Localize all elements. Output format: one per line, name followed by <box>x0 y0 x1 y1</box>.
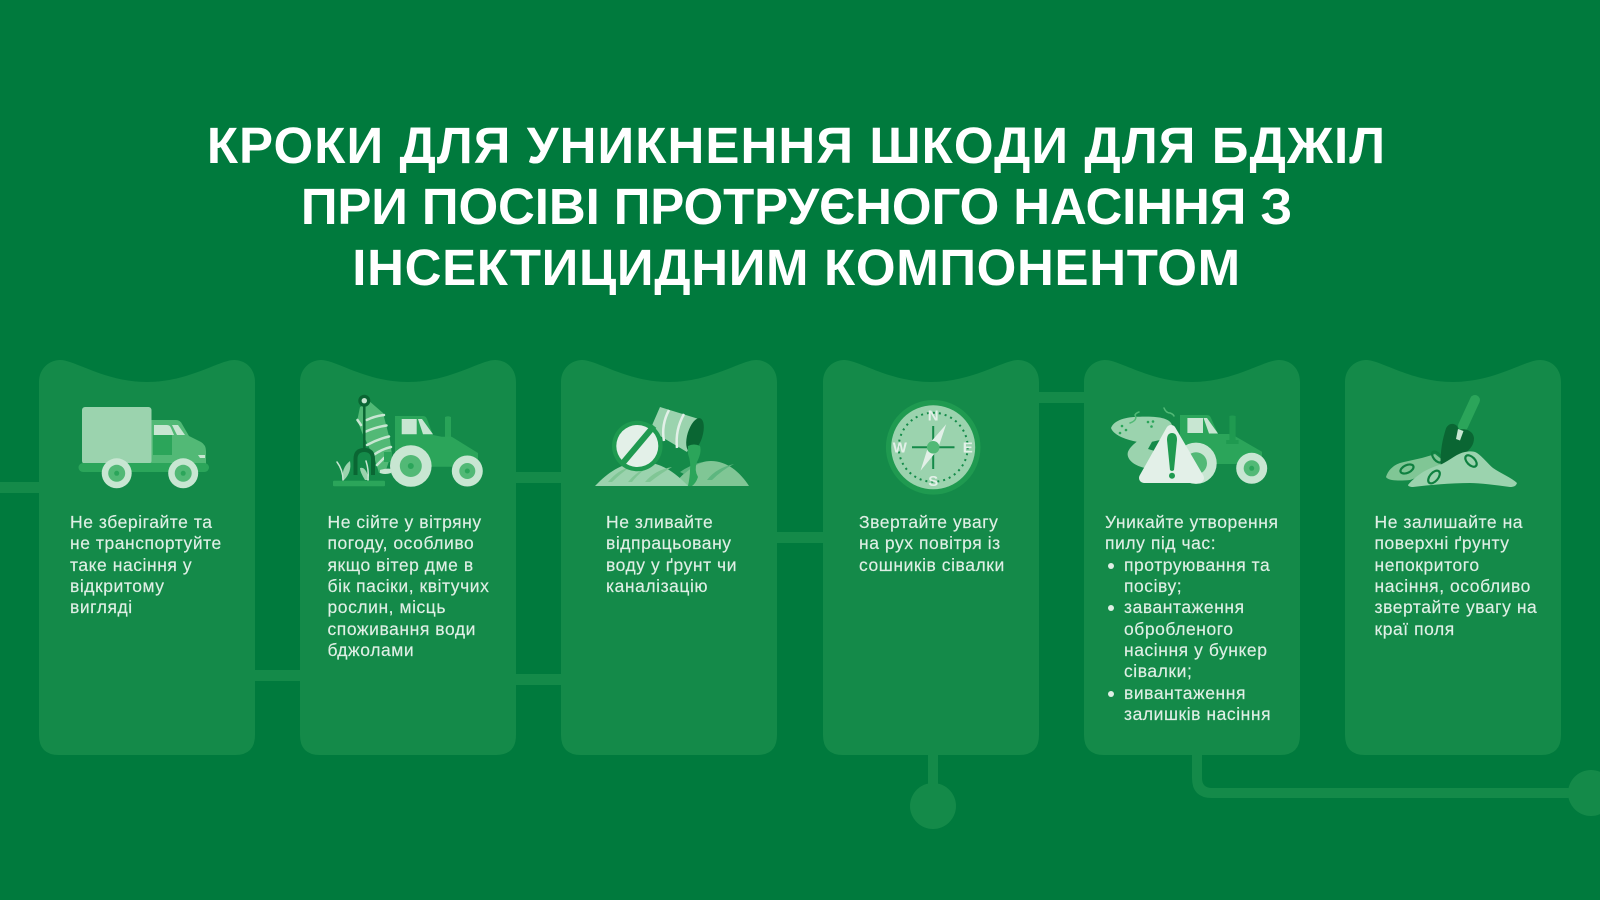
text: storage <box>70 512 222 617</box>
card shape <box>300 360 516 755</box>
text: seeds: звертайте увагу на <box>1374 597 1537 617</box>
text: dust: протруювання та <box>1124 555 1270 575</box>
icon: compass: N <box>927 408 938 424</box>
icon: trowel in seed pile <box>1386 400 1517 487</box>
text: wind: якщо вітер дме в <box>328 555 474 575</box>
icon: do not pour water <box>595 407 749 486</box>
text: air: Звертайте увагу <box>859 512 998 532</box>
text: wind: споживання води <box>328 619 476 639</box>
text: dust: завантаження <box>1124 597 1245 617</box>
text: water: воду у ґрунт чи <box>606 555 737 575</box>
icon: compass: E <box>962 440 972 456</box>
text: water: відпрацьовану <box>606 533 732 553</box>
card shape <box>822 360 1038 755</box>
text: storage: вигляді <box>70 597 133 617</box>
text: seeds: поверхні ґрунту <box>1374 533 1510 553</box>
text: seeds: насіння, особливо <box>1374 576 1531 596</box>
text: dust: обробленого <box>1124 619 1234 639</box>
text: wind: бік пасіки, квітучих <box>328 576 489 596</box>
card shape <box>1084 360 1300 755</box>
text: air: сошників сівалки <box>859 555 1005 575</box>
card shape <box>39 360 255 755</box>
text: dust: залишків насіння <box>1124 704 1271 724</box>
title: ІНСЕКТИЦИДНИМ КОМПОНЕНТОМ <box>352 239 1241 296</box>
text: dust: посіву; <box>1124 576 1182 596</box>
text: seeds <box>1374 512 1537 639</box>
panel: waste water <box>561 360 777 755</box>
icon: compass: S <box>928 473 938 490</box>
panel: windy weather <box>300 360 516 755</box>
text: storage: таке насіння у <box>70 555 192 575</box>
text: seeds: Не залишайте на <box>1374 512 1523 532</box>
text: dust: сівалки; <box>1124 661 1192 681</box>
text: storage: Не зберігайте та <box>70 512 213 532</box>
panel: air flow <box>823 360 1039 755</box>
text: water: Не зливайте <box>606 512 713 532</box>
text: dust <box>1105 512 1279 724</box>
text: dust: Уникайте утворення <box>1105 512 1279 532</box>
card shape <box>1345 360 1561 755</box>
text: wind: Не сійте у вітряну <box>328 512 482 532</box>
text: wind: бджолами <box>328 640 414 660</box>
title: ПРИ ПОСІВІ ПРОТРУЄНОГО НАСІННЯ З <box>301 178 1292 235</box>
text: wind: рослин, місць <box>328 597 446 617</box>
text: air <box>859 512 1005 575</box>
panel: dust <box>1084 360 1300 755</box>
text: dust: вивантаження <box>1124 683 1246 703</box>
title: КРОКИ ДЛЯ УНИКНЕННЯ ШКОДИ ДЛЯ БДЖІЛ <box>207 117 1386 174</box>
text: dust: насіння у бункер <box>1124 640 1268 660</box>
text: air: на рух повітря із <box>859 533 1001 553</box>
card shape <box>561 360 777 755</box>
text: wind <box>328 512 489 660</box>
panel: storage and transport <box>39 360 255 755</box>
icon: tractor with seeder <box>333 395 483 487</box>
icon: truck <box>78 407 209 488</box>
text: water <box>606 512 737 596</box>
panel: exposed seeds <box>1345 360 1561 755</box>
icon: compass <box>885 400 980 495</box>
text: storage: не транспортуйте <box>70 533 222 553</box>
text: seeds: краї поля <box>1374 619 1455 639</box>
text: dust: пилу під час: <box>1105 533 1216 553</box>
text: water: каналізацію <box>606 576 708 596</box>
title <box>207 117 1386 296</box>
text: wind: погоду, особливо <box>328 533 474 553</box>
icon: tractor, dust and warning <box>1111 408 1267 484</box>
icon: compass: W <box>892 440 907 456</box>
text: storage: відкритому <box>70 576 165 596</box>
text: seeds: непокритого <box>1374 555 1480 575</box>
